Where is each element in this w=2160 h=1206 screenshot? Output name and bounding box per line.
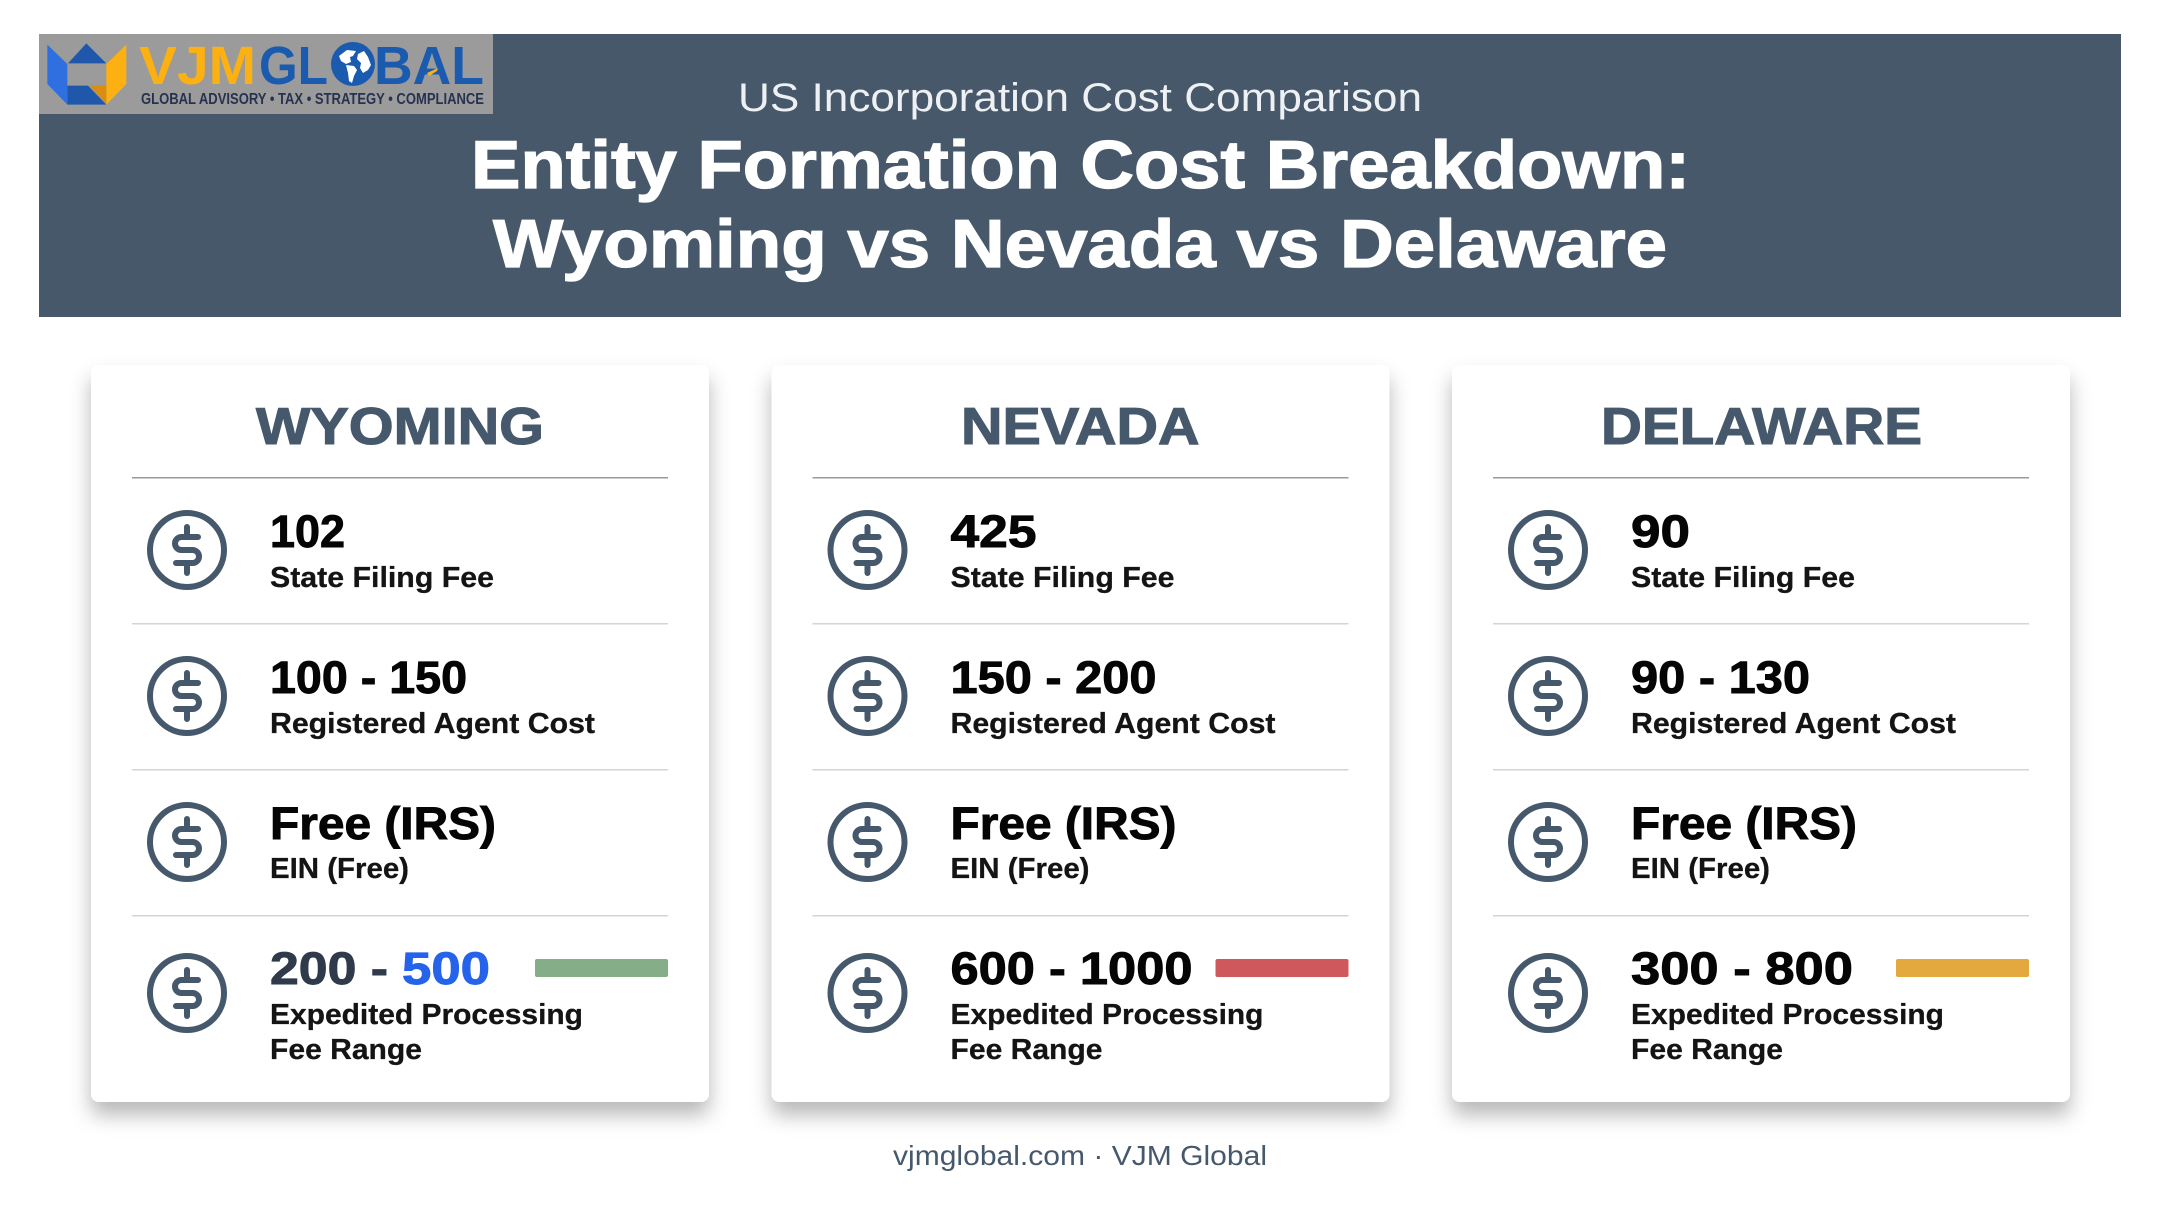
row: EIN: Free (IRS): [950, 798, 1176, 849]
row: state filing fee: [150, 506, 494, 594]
icon: dollar coin: [150, 805, 224, 879]
panel: Nevada: [772, 365, 1390, 1102]
row: state filing fee: State Filing Fee: [1631, 562, 1855, 594]
row: expedited processing: Expedited Processing: [270, 999, 583, 1031]
logo wordmark: O: [332, 36, 374, 96]
row: state filing fee: 102: [270, 506, 345, 557]
icon: dollar coin: [1511, 513, 1585, 587]
panel: Delaware: [1452, 365, 2070, 1102]
row: EIN: [150, 798, 496, 885]
logo tagline: GLOBAL ADVISORY • TAX • STRATEGY • COMPLIANCE: [141, 91, 484, 108]
row: EIN: Free (IRS): [270, 798, 496, 849]
row: registered agent cost: 150 - 200: [950, 652, 1156, 703]
logo: VJM Global: [39, 34, 493, 114]
row: registered agent cost: Registered Agent Cost: [950, 708, 1276, 740]
row: EIN: [1511, 798, 1857, 885]
row: registered agent cost: 100 - 150: [270, 652, 467, 703]
subtitle: US Incorporation Cost Comparison: [738, 76, 1422, 120]
header banner: [39, 34, 2121, 317]
icon: globe: [331, 42, 375, 86]
row: expedited processing: Fee Range: [950, 1034, 1102, 1066]
row: expedited processing: 200 -: [270, 943, 388, 994]
row: EIN: EIN (Free): [1631, 853, 1770, 885]
logo wordmark: [139, 36, 484, 96]
panel: Wyoming: [91, 365, 709, 1102]
title: Wyoming vs Nevada vs Delaware: [493, 206, 1667, 282]
row: state filing fee: [1511, 506, 1855, 594]
row: expedited processing: [150, 943, 668, 1066]
icon: dollar coin: [830, 956, 904, 1030]
row: expedited processing: Fee Range: [270, 1034, 422, 1066]
row: state filing fee: State Filing Fee: [270, 562, 494, 594]
row: expedited processing: 500: [402, 943, 490, 994]
icon: dollar coin: [1511, 805, 1585, 879]
heading: Wyoming: WYOMING: [256, 398, 544, 456]
icon: dollar coin: [1511, 659, 1585, 733]
row: registered agent cost: Registered Agent Cost: [270, 708, 595, 740]
icon: dollar coin: [830, 805, 904, 879]
row: state filing fee: 90: [1631, 506, 1690, 557]
row: EIN: EIN (Free): [270, 853, 409, 885]
row: state filing fee: 425: [950, 506, 1036, 557]
icon: dollar coin: [830, 659, 904, 733]
icon: dollar coin: [1511, 956, 1585, 1030]
range bar: amber: [1896, 959, 2029, 977]
range bar: green: [535, 959, 668, 977]
heading: Delaware: DELAWARE: [1601, 398, 1922, 456]
icon: dollar coin: [150, 956, 224, 1030]
logo wordmark: VJM: [139, 36, 256, 96]
row: expedited processing: [1511, 943, 2029, 1066]
row: state filing fee: [830, 506, 1174, 594]
heading: Nevada: NEVADA: [961, 398, 1200, 456]
footer source: vjmglobal.com · VJM Global: [893, 1140, 1267, 1171]
icon: dollar coin: [150, 513, 224, 587]
icon: dollar coin: [830, 513, 904, 587]
range bar: red: [1216, 959, 1348, 977]
title: Entity Formation Cost Breakdown:: [471, 127, 1690, 203]
row: EIN: EIN (Free): [950, 853, 1090, 885]
icon: logo mark: [47, 43, 126, 105]
row: EIN: [830, 798, 1176, 885]
row: expedited processing: Expedited Processing: [1631, 999, 1944, 1031]
row: state filing fee: State Filing Fee: [950, 562, 1174, 594]
row: expedited processing: Expedited Processing: [950, 999, 1264, 1031]
row: registered agent cost: Registered Agent Cost: [1631, 708, 1956, 740]
row: expedited processing: [830, 943, 1348, 1066]
row: registered agent cost: [150, 652, 595, 740]
icon: dollar coin: [150, 659, 224, 733]
row: expedited processing: Fee Range: [1631, 1034, 1783, 1066]
row: expedited processing: 300 - 800: [1631, 943, 1853, 994]
row: registered agent cost: [830, 652, 1276, 740]
row: expedited processing: 600 - 1000: [950, 943, 1192, 994]
row: registered agent cost: 90 - 130: [1631, 652, 1810, 703]
row: registered agent cost: [1511, 652, 1956, 740]
title: [471, 127, 1690, 282]
logo wordmark: BAL: [374, 36, 484, 96]
row: EIN: Free (IRS): [1631, 798, 1857, 849]
logo wordmark: GL: [259, 36, 328, 96]
